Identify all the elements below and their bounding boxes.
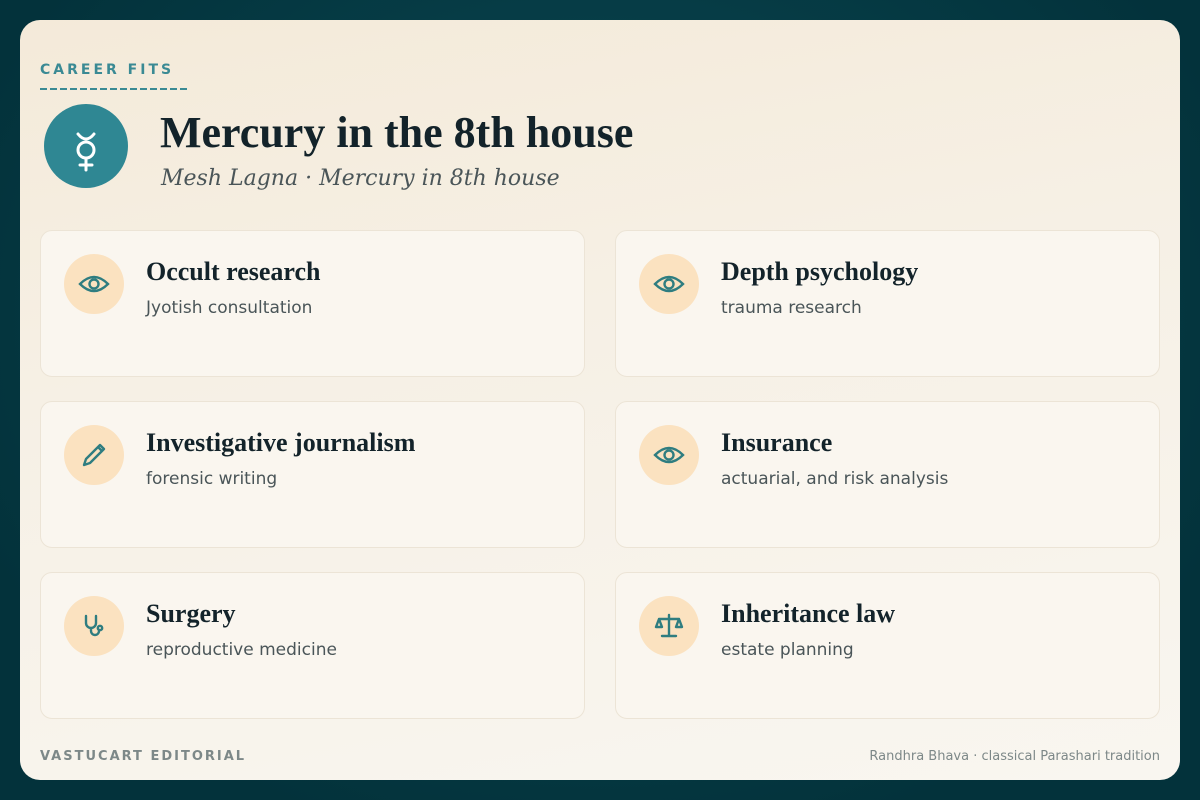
icon: stethoscope	[64, 596, 124, 656]
panel: inheritance law: Inheritance law	[721, 599, 895, 628]
panel: depth psychology	[615, 230, 1160, 377]
footer: source: Randhra Bhava · classical Parashari tradition	[869, 749, 1160, 764]
title: Mercury in the 8th house	[160, 108, 633, 157]
panel: occult research	[40, 230, 585, 377]
icon: eye	[639, 254, 699, 314]
icon: eye	[639, 425, 699, 485]
icon: mercury symbol	[44, 104, 128, 188]
footer: brand: VASTUCART EDITORIAL	[40, 749, 246, 764]
panel: investigative journalism: forensic writing	[146, 469, 277, 489]
panel: insurance	[615, 401, 1160, 548]
panel: surgery: Surgery	[146, 599, 236, 628]
icon: scales	[639, 596, 699, 656]
panel: depth psychology: trauma research	[721, 298, 862, 318]
panel: occult research: Jyotish consultation	[146, 298, 312, 318]
panel: depth psychology: Depth psychology	[721, 257, 918, 286]
panel: inheritance law	[615, 572, 1160, 719]
icon: eye	[64, 254, 124, 314]
panel: insurance: Insurance	[721, 428, 832, 457]
panel: surgery	[40, 572, 585, 719]
panel: occult research: Occult research	[146, 257, 320, 286]
subtitle: Mesh Lagna · Mercury in 8th house	[161, 166, 560, 191]
panel: inheritance law: estate planning	[721, 640, 854, 660]
panel: surgery: reproductive medicine	[146, 640, 337, 660]
icon: pen	[64, 425, 124, 485]
kicker: career fits: CAREER FITS	[40, 62, 174, 78]
panel: investigative journalism	[40, 401, 585, 548]
panel: investigative journalism: Investigative journalism	[146, 428, 415, 457]
panel: insurance: actuarial, and risk analysis	[721, 469, 948, 489]
